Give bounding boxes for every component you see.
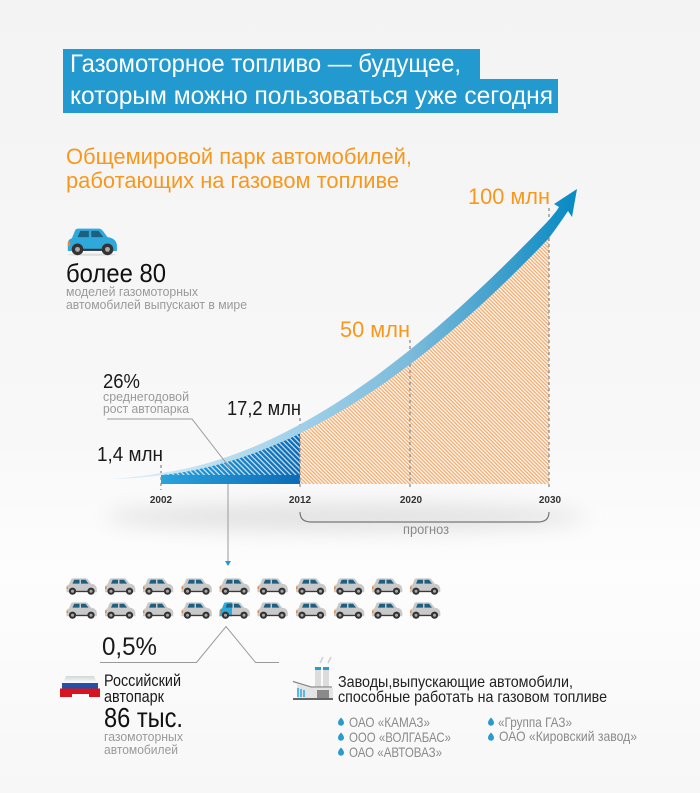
heading: global fleet: Общемировой парк автомобилей, xyxy=(66,144,412,169)
stat: more than 80 models: автомобилей выпускают в мире xyxy=(66,298,247,312)
value labels: 50 млн xyxy=(340,317,410,342)
stat: Russian fleet: газомоторных xyxy=(104,729,183,744)
factory list xyxy=(338,714,637,760)
stat: more than 80 models xyxy=(66,258,247,312)
heading: factories xyxy=(338,674,607,706)
title xyxy=(63,49,558,113)
factory list: ОАО «КАМАЗ» xyxy=(349,714,430,730)
blue base bar xyxy=(161,475,300,484)
callout: 0.5% xyxy=(100,626,279,662)
factory list: «Группа ГАЗ» xyxy=(498,714,572,730)
callout: 26% growth: рост автопарка xyxy=(103,401,190,416)
axis years xyxy=(150,495,562,506)
value labels: 17,2 млн xyxy=(227,398,301,420)
forecast hatched area xyxy=(300,239,549,484)
factory list: ОАО «Кировский завод» xyxy=(499,728,637,744)
icon: blue car xyxy=(68,229,117,256)
stat: Russian fleet xyxy=(104,671,183,757)
highlighted blue car xyxy=(220,602,232,619)
icon: Russian flag car xyxy=(60,676,100,697)
value labels: 1,4 млн xyxy=(97,444,163,466)
icon: factory xyxy=(293,657,333,700)
stat: Russian fleet: автомобилей xyxy=(104,742,178,757)
heading: global fleet xyxy=(66,144,412,193)
growth arrow xyxy=(108,189,577,479)
stat: more than 80 models: более 80 xyxy=(66,258,166,288)
heading: factories: способные работать на газовом топливе xyxy=(338,689,607,706)
chart: growth curve xyxy=(108,189,577,490)
stat: Russian fleet: Российский xyxy=(104,671,181,690)
value labels: 100 млн xyxy=(468,184,550,209)
axis years: 2002 xyxy=(150,495,173,506)
title: которым можно пользоваться уже сегодня xyxy=(70,82,553,110)
chart floor shadow xyxy=(105,503,585,531)
factory list: ОАО «АВТОВАЗ» xyxy=(349,744,442,760)
stat: more than 80 models: моделей газомоторных xyxy=(66,285,199,299)
axis years: 2020 xyxy=(400,495,423,506)
car grid xyxy=(66,578,440,619)
axis years: 2012 xyxy=(289,495,312,506)
callout: 26% growth xyxy=(103,371,230,468)
callout: 0.5%: 0,5% xyxy=(102,633,157,661)
heading: factories: Заводы,выпускающие автомобили, xyxy=(338,674,573,691)
forecast bracket: прогноз xyxy=(403,521,449,537)
callout: 26% growth: 26% xyxy=(103,371,140,393)
year dotted guides xyxy=(161,208,549,490)
title: Газомоторное топливо — будущее, xyxy=(70,50,461,78)
arrow: down to cars xyxy=(225,484,231,566)
stat: Russian fleet: автопарк xyxy=(104,687,164,706)
stat: Russian fleet: 86 тыс. xyxy=(104,702,183,733)
actual area xyxy=(162,434,300,475)
callout: 26% growth: среднегодовой xyxy=(103,389,189,404)
value labels xyxy=(97,184,550,466)
heading: global fleet: работающих на газовом топливе xyxy=(66,168,399,193)
axis years: 2030 xyxy=(539,495,562,506)
factory list: ООО «ВОЛГАБАС» xyxy=(349,729,451,745)
forecast bracket xyxy=(300,512,549,537)
